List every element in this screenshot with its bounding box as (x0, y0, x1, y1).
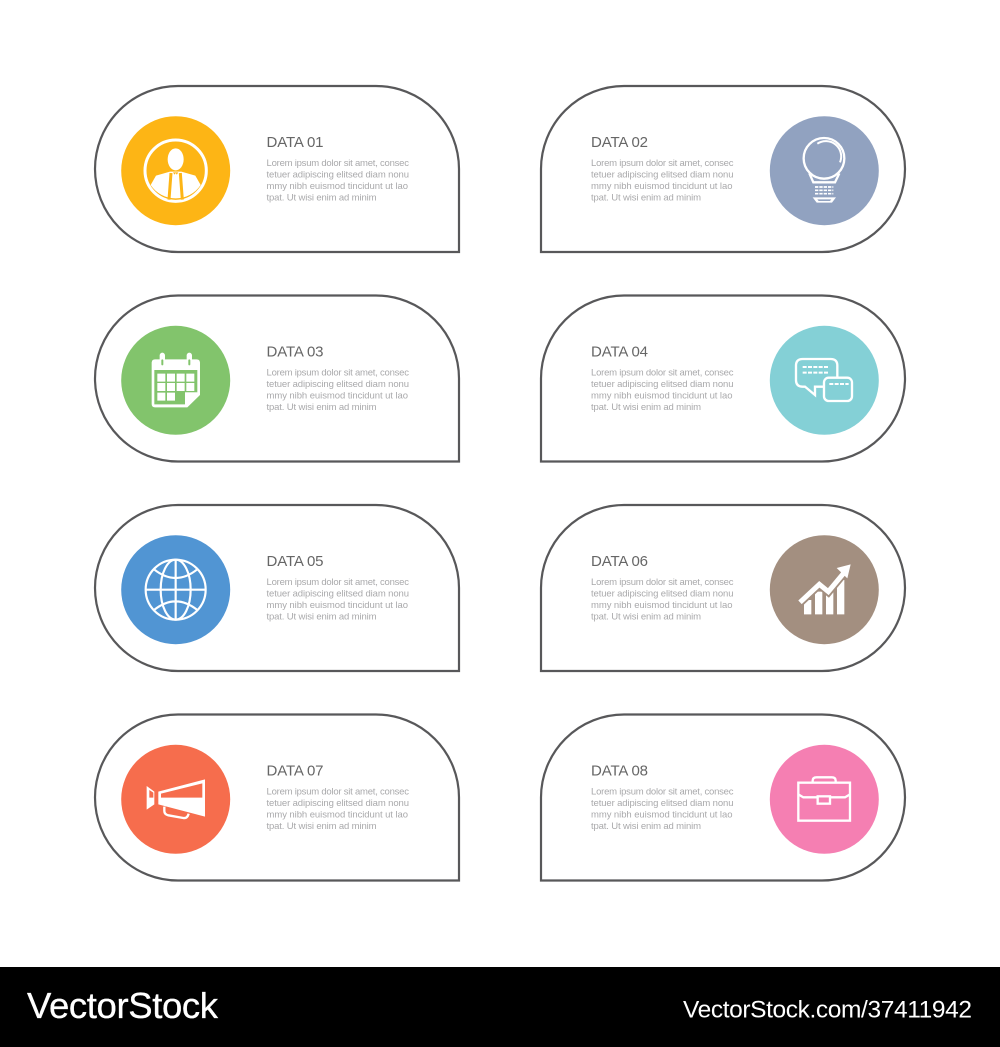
heading: DATA 07 (266, 762, 324, 780)
body text: tetuer adipiscing elitsed diam nonu (591, 379, 734, 390)
footer logo text: VectorStock (27, 985, 219, 1026)
panel: data 02 (541, 86, 905, 252)
card outline (95, 296, 459, 462)
body text: tpat. Ut wisi enim ad minim (591, 402, 701, 413)
body text (266, 158, 409, 204)
icon circle: globe (121, 535, 230, 644)
card outline (541, 505, 905, 671)
body text: tetuer adipiscing elitsed diam nonu (266, 588, 409, 600)
heading: DATA 04 (591, 344, 648, 360)
panel: data 01 (95, 86, 459, 252)
body text: Lorem ipsum dolor sit amet, consec (266, 368, 409, 378)
body text: mmy nibh euismod tincidunt ut lao (266, 181, 408, 192)
heading: DATA 05 (266, 553, 324, 570)
body text (266, 368, 409, 413)
body text: tpat. Ut wisi enim ad minim (591, 612, 701, 622)
icon circle: light bulb (770, 116, 879, 225)
body text: tpat. Ut wisi enim ad minim (266, 402, 377, 413)
heading: DATA 06 (591, 553, 648, 570)
body text (591, 577, 734, 622)
body text (591, 158, 734, 204)
body text: tetuer adipiscing elitsed diam nonu (591, 170, 734, 180)
panel: data 07 (95, 714, 459, 880)
panel: data 03 (95, 296, 459, 462)
body text: mmy nibh euismod tincidunt ut lao (591, 810, 732, 820)
body text: tpat. Ut wisi enim ad minim (591, 192, 701, 204)
body text (591, 368, 734, 413)
panel: data 04 (541, 296, 905, 462)
body text: Lorem ipsum dolor sit amet, consec (591, 577, 734, 588)
panel: data 05 (95, 505, 459, 671)
icon circle: rising chart (770, 535, 879, 644)
icon circle: megaphone (121, 745, 230, 854)
body text: Lorem ipsum dolor sit amet, consec (591, 786, 734, 798)
body text: mmy nibh euismod tincidunt ut lao (266, 390, 408, 402)
panel: data 06 (541, 505, 905, 671)
body text: tetuer adipiscing elitsed diam nonu (266, 170, 409, 180)
icon circle: person (121, 116, 230, 225)
card outline (541, 296, 905, 462)
footer image id: VectorStock.com/37411942 (683, 996, 972, 1024)
body text (266, 786, 409, 832)
body text: tpat. Ut wisi enim ad minim (591, 821, 701, 832)
heading: DATA 08 (591, 762, 648, 780)
heading: DATA 02 (591, 134, 648, 151)
card outline (95, 714, 459, 880)
card outline (95, 505, 459, 671)
body text: tetuer adipiscing elitsed diam nonu (591, 588, 734, 600)
panel: data 08 (541, 714, 905, 880)
body text (591, 786, 734, 832)
body text (266, 577, 409, 622)
body text: mmy nibh euismod tincidunt ut lao (266, 600, 408, 611)
body text: tpat. Ut wisi enim ad minim (266, 192, 377, 204)
heading: DATA 03 (266, 344, 324, 360)
icon circle: briefcase (770, 745, 879, 854)
body text: Lorem ipsum dolor sit amet, consec (266, 577, 409, 588)
body text: mmy nibh euismod tincidunt ut lao (266, 810, 408, 820)
body text: tetuer adipiscing elitsed diam nonu (266, 798, 409, 809)
body text: Lorem ipsum dolor sit amet, consec (591, 158, 734, 169)
body text: mmy nibh euismod tincidunt ut lao (591, 390, 732, 402)
body text: Lorem ipsum dolor sit amet, consec (266, 158, 409, 169)
card outline (541, 714, 905, 880)
body text: tetuer adipiscing elitsed diam nonu (591, 798, 734, 809)
body text: mmy nibh euismod tincidunt ut lao (591, 600, 732, 611)
body text: mmy nibh euismod tincidunt ut lao (591, 181, 732, 192)
icon circle: calendar (121, 326, 230, 435)
icon circle: speech bubbles (770, 326, 879, 435)
card outline (95, 86, 459, 252)
body text: Lorem ipsum dolor sit amet, consec (591, 368, 734, 378)
body text: tetuer adipiscing elitsed diam nonu (266, 379, 409, 390)
body text: tpat. Ut wisi enim ad minim (266, 612, 377, 622)
body text: tpat. Ut wisi enim ad minim (266, 821, 377, 832)
heading: DATA 01 (266, 134, 324, 151)
body text: Lorem ipsum dolor sit amet, consec (266, 786, 409, 798)
card outline (541, 86, 905, 252)
footer bar (0, 967, 1000, 1047)
